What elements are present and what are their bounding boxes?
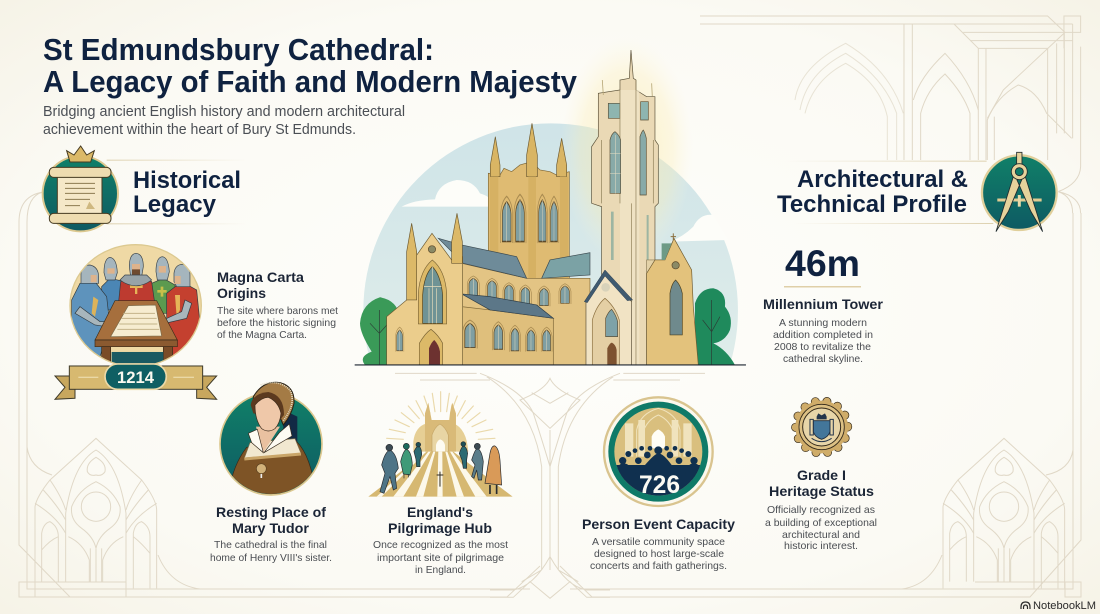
heading: architectural and technical profile: Technical Profile	[777, 191, 967, 218]
text: grade i heritage status: architectural and	[782, 529, 860, 541]
text: england's pilgrimage hub: in England.	[415, 564, 466, 576]
text: england's pilgrimage hub: Once recognized as the most	[373, 539, 508, 551]
text: grade i heritage status: historic interest.	[784, 540, 858, 552]
clouds	[402, 180, 728, 242]
badge: 726 capacity: 726	[639, 471, 680, 499]
logo: notebooklm: NotebookLM	[1033, 600, 1096, 612]
ground line	[355, 363, 746, 367]
sky circle	[363, 123, 738, 359]
text: person event capacity	[582, 516, 735, 572]
icon: scroll and crown	[43, 146, 247, 231]
stat: 46m millennium tower: Millennium Tower	[763, 296, 884, 312]
trees	[360, 288, 735, 365]
church	[413, 403, 468, 452]
heading: historical legacy	[133, 167, 241, 218]
illustration: cathedral	[354, 50, 746, 366]
sunburst	[387, 392, 495, 439]
text: grade i heritage status: Heritage Status	[769, 483, 874, 499]
text: resting place of mary tudor	[210, 504, 332, 564]
text: resting place of mary tudor: The cathedral is the final	[214, 539, 327, 551]
stat: 46m millennium tower: A stunning modern	[779, 317, 867, 329]
ground rays	[368, 452, 513, 497]
stat: 46m millennium tower: cathedral skyline.	[783, 353, 863, 365]
heading: historical legacy: Legacy	[133, 191, 216, 218]
knights	[101, 279, 121, 310]
text: grade i heritage status: Officially recognized as	[767, 504, 875, 516]
illustration: pilgrims	[368, 392, 513, 497]
helmets	[81, 253, 190, 287]
east transept	[647, 233, 698, 365]
stat: 46m millennium tower	[763, 243, 884, 365]
subtitle	[43, 103, 405, 138]
text: england's pilgrimage hub: England's	[407, 504, 473, 520]
text: resting place of mary tudor: Resting Place of	[216, 504, 326, 520]
ribbon: 1214	[55, 364, 217, 399]
heading: historical legacy: Historical	[133, 167, 241, 194]
text: person event capacity: Person Event Capacity	[582, 516, 735, 532]
text: grade i heritage status: a building of exceptional	[765, 517, 877, 529]
text: person event capacity: concerts and faith gatherings.	[590, 560, 727, 572]
table	[95, 301, 177, 340]
text: magna carta origins	[217, 269, 338, 341]
text: magna carta origins: Origins	[217, 285, 266, 301]
west front	[387, 213, 463, 365]
text: magna carta origins: Magna Carta	[217, 269, 304, 285]
text: person event capacity: A versatile community space	[592, 536, 725, 548]
text: england's pilgrimage hub: Pilgrimage Hub	[388, 520, 492, 536]
millennium tower	[592, 50, 662, 365]
stat: 46m millennium tower: addition completed in	[773, 329, 873, 341]
icon: compass	[783, 152, 1057, 232]
text: resting place of mary tudor: Mary Tudor	[232, 520, 310, 536]
nave	[438, 238, 590, 365]
heading: architectural and technical profile: Architectural &	[797, 166, 968, 193]
text: england's pilgrimage hub	[373, 504, 508, 576]
central tower	[488, 123, 569, 280]
title: St Edmundsbury Cathedral:	[43, 32, 434, 67]
stat: 46m millennium tower: 46m	[785, 243, 860, 284]
stat: 46m millennium tower: 2008 to revitalize the	[774, 341, 871, 353]
text: grade i heritage status: Grade I	[797, 467, 846, 483]
illustration: barons and magna carta	[70, 245, 202, 367]
badge: 726 capacity	[604, 397, 713, 506]
subtitle: Bridging ancient English history and modern architectural	[43, 103, 405, 120]
crown	[67, 146, 94, 162]
text: magna carta origins: before the historic signing	[217, 317, 336, 329]
tower glow	[560, 37, 693, 263]
title: A Legacy of Faith and Modern Majesty	[43, 64, 578, 99]
text: england's pilgrimage hub: important site of pilgrimage	[377, 552, 504, 564]
icon: grade i seal	[795, 401, 848, 453]
subtitle: achievement within the heart of Bury St Edmunds.	[43, 121, 356, 138]
text: magna carta origins: of the Magna Carta.	[217, 329, 307, 341]
text: person event capacity: designed to host large-scale	[594, 548, 724, 560]
ribbon: 1214: 1214	[117, 368, 155, 387]
title	[43, 32, 578, 99]
heading: architectural and technical profile	[777, 166, 968, 218]
portrait: mary tudor	[220, 382, 322, 497]
porch	[584, 270, 633, 365]
text: grade i heritage status	[765, 467, 877, 552]
text: resting place of mary tudor: home of Henry VIII's sister.	[210, 552, 332, 564]
text: magna carta origins: The site where barons met	[217, 305, 338, 317]
people	[380, 442, 502, 494]
